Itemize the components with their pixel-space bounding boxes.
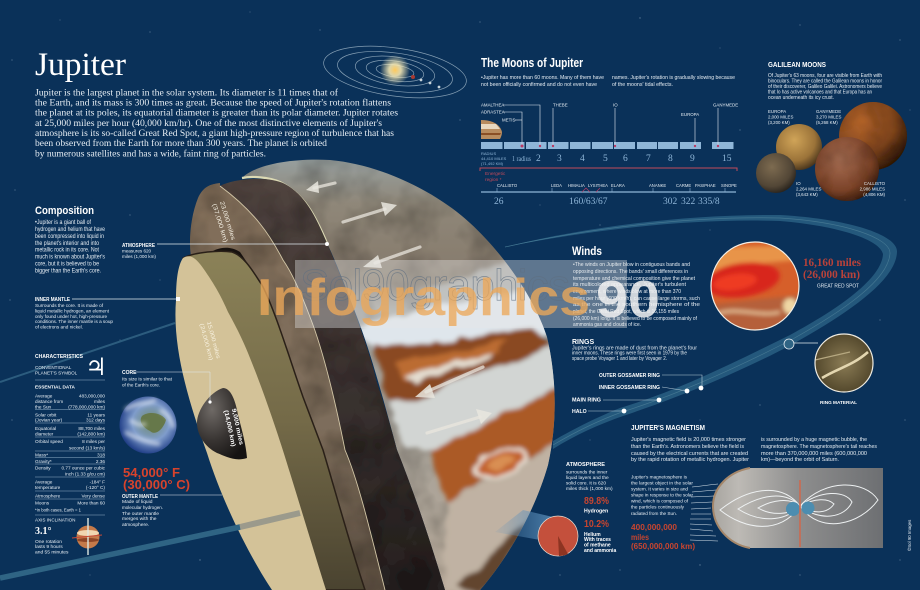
moon data labels: EUROPA	[768, 109, 786, 114]
radius numbers: 5	[603, 154, 608, 164]
outer moon names: CALLISTO	[497, 183, 518, 188]
essential data: 2.36	[96, 459, 105, 464]
spot size label: (26,000 km)	[803, 269, 860, 281]
wind arrows	[306, 181, 492, 433]
outer moon names: ELARA	[611, 183, 625, 188]
inner mantle callout: Surrounds the core. It is made of	[35, 303, 104, 309]
rings text	[572, 346, 697, 362]
outer moon numbers: 335/8	[698, 197, 720, 207]
inner moon names: GANYMEDE	[713, 102, 738, 108]
essential data: 483,000,000	[79, 394, 105, 398]
outer moon names: ANANKE	[649, 183, 666, 188]
moons text	[481, 75, 735, 88]
panel: moons of Jupiter	[480, 56, 738, 207]
essential data: Atmosphere	[35, 494, 61, 498]
core callout: of the Earth's core.	[122, 382, 160, 388]
radius note	[481, 151, 507, 166]
Galilean text: binoculars. They are called the Galilean moons in honor	[768, 78, 882, 84]
table rules	[35, 380, 105, 515]
inner moon names: THEBE	[553, 102, 568, 108]
radius numbers: 3	[557, 154, 562, 164]
essential data: 8 miles per	[82, 439, 105, 444]
size label inner mantle: (24,000 km)	[198, 323, 213, 361]
essential data: inch (1.33 g/cu cm)	[65, 472, 105, 476]
essential data: Very dense	[82, 494, 105, 498]
essential data: 318	[97, 452, 105, 458]
hydrogen stat: 89.8%	[584, 496, 609, 507]
magnetism text: than the Earth's. Astronomers believe the field is	[631, 444, 744, 450]
essential data: Solar orbit	[35, 412, 57, 418]
essential data: temperature	[35, 485, 61, 490]
dark atmosphere layer	[220, 179, 445, 590]
hydrogen stat	[584, 496, 609, 514]
outer mantle callout: merges with the	[122, 516, 157, 522]
radius numbers: 7	[646, 154, 651, 164]
radius numbers: 15	[722, 154, 732, 164]
moons text: •Jupiter has more than 60 moons. Many of them have	[481, 75, 604, 81]
core callout: CORE	[122, 370, 137, 376]
winds text: environment, where winds blow at more than 370	[573, 289, 681, 295]
size label core	[222, 408, 244, 448]
core temperature: (30,000° C)	[123, 478, 190, 492]
size label inner mantle	[198, 321, 221, 361]
outer moon names: LEDA	[551, 183, 562, 188]
winds text: planet, the Great Red Spot, which is 16,155 miles	[573, 309, 679, 315]
outer moon names: PASIPHAE	[695, 183, 716, 188]
panel: Galilean moons	[756, 62, 907, 201]
rings text: inner moons. These rings were first seen in 1979 by the	[572, 350, 687, 356]
magnetosphere diagram	[690, 468, 883, 548]
magnetosphere distance: miles	[631, 532, 649, 542]
intro paragraph: atmosphere is its so-called Great Red Spot, a giant high-pressure region of turbulence that has	[35, 128, 394, 139]
winds text: its multicolored appearance. Jupiter's turbulent	[573, 282, 686, 288]
essential data: -184° F	[90, 480, 105, 484]
magnetism text: caused by the electrical currents that are created	[631, 451, 748, 457]
moon data labels: 2,264 MILES	[796, 186, 821, 192]
radius note: RADIUS	[481, 151, 496, 156]
inner mantle callout: liquid metallic hydrogen, an element	[35, 308, 110, 314]
panel: core	[120, 370, 222, 528]
moon data labels: 3,270 MILES	[816, 114, 841, 120]
essential data: second (13 km/s)	[69, 446, 105, 450]
essential data: distance from	[35, 399, 63, 404]
essential data: diameter	[35, 432, 54, 436]
size label core: (14,000 km)	[222, 410, 236, 447]
composition text: the planet's interior and into	[35, 241, 100, 247]
globe light rim	[242, 177, 327, 243]
hydrogen stat: Hydrogen	[584, 508, 608, 514]
core temperature	[123, 466, 190, 492]
radius numbers: 8	[668, 154, 673, 164]
magnetism text	[631, 437, 877, 463]
inner moon names: METIS	[502, 118, 515, 122]
brown mantle ring	[190, 183, 385, 590]
helium stat: With traces	[584, 537, 611, 543]
moons text: names. Jupiter's rotation is gradually slowing because	[612, 75, 735, 81]
icon: Jupiter symbol: ♃	[85, 353, 107, 381]
magnetism text: by the rapid rotation of metallic hydrogen. Jupiter	[631, 457, 749, 463]
field lines	[720, 485, 878, 526]
outer mantle callout	[122, 494, 222, 528]
inner moon leaders	[503, 105, 718, 146]
essential data: More than 60	[77, 500, 105, 506]
core temperature: 54,000° F	[123, 466, 180, 480]
moon Europa	[776, 124, 822, 170]
magnetosphere distance	[631, 522, 695, 551]
atmosphere callout: ATMOSPHERE	[122, 243, 156, 249]
essential data	[35, 384, 106, 512]
rings text: space probe Voyager 1 and later by Voyager 2.	[572, 356, 667, 362]
panel: composition	[35, 205, 329, 330]
moons text: of the moons' tidal effects.	[612, 82, 673, 88]
radius numbers: 4	[580, 154, 585, 164]
magnetism heading: JUPITER'S MAGNETISM	[631, 425, 705, 432]
composition text: much is known about Jupiter's	[35, 254, 105, 260]
characteristics heading: CHARACTERISTICS	[35, 354, 84, 360]
axis inclination: and 55 minutes	[35, 550, 69, 556]
essential data: (142,800 km)	[77, 432, 105, 436]
outer moon scale	[481, 188, 736, 192]
composition text: core, but it is believed to be	[35, 262, 100, 268]
atmosphere heading: ATMOSPHERE	[566, 462, 605, 468]
radius note: (71,492 KM)	[481, 161, 504, 166]
magnetism text: km)—beyond the orbit of Saturn.	[761, 457, 839, 463]
composition text	[35, 220, 106, 274]
magnetosphere distance: (650,000,000 km)	[631, 541, 695, 551]
size label atmosphere: 23,000 miles	[218, 201, 236, 241]
outer mantle callout: Made of liquid	[122, 499, 153, 505]
axis inclination: One rotation	[35, 539, 62, 545]
panel: winds	[572, 242, 861, 335]
magnetosphere note: shape in response to the solar	[631, 492, 693, 498]
solar system orbit icon	[320, 38, 470, 106]
watermark: Sol90graphics	[300, 261, 570, 310]
image credit: ©Sol 90 Images	[907, 519, 912, 551]
winds text: (26,000 km) long. It is believed to be composed mainly of	[573, 316, 697, 322]
moon data labels: (4,806 KM)	[863, 192, 886, 197]
Great Red Spot inset	[710, 241, 800, 331]
inner moon names: EUROPA	[681, 112, 699, 117]
pie chart	[538, 516, 578, 556]
magnetosphere note: system. It varies in size and	[631, 486, 688, 492]
title: Jupiter	[35, 47, 126, 83]
composition text: bigger than the Earth's core.	[35, 268, 101, 274]
ring edge highlight	[220, 186, 385, 590]
outer mantle callout: molecular hydrogen.	[122, 505, 163, 511]
outer moon numbers	[494, 197, 720, 207]
winds text	[573, 262, 700, 328]
inner moon names: AMALTHEA	[481, 102, 504, 108]
axis inclination	[35, 518, 76, 556]
olive inner mantle side	[183, 251, 365, 590]
helium stat: of methane	[584, 542, 611, 548]
composition text: hydrogen and helium that have	[35, 227, 106, 233]
outer moon numbers: 26	[494, 197, 504, 207]
essential data: Moons	[35, 500, 50, 506]
ring labels: OUTER GOSSAMER RING	[599, 373, 660, 379]
essential data: (-120° C)	[86, 485, 105, 490]
outer moon names: CARME	[676, 183, 691, 188]
spot size label	[803, 257, 861, 290]
Galilean text: that Io has active volcanoes and that Europa has an	[768, 90, 872, 96]
winds text: •The winds on Jupiter blow in contiguous bands and	[573, 262, 690, 268]
essential data: Mass*	[35, 452, 48, 458]
moon position dots	[520, 144, 719, 148]
outer mantle callout: atmosphere.	[122, 522, 149, 528]
radius numbers: 1 radius	[512, 155, 531, 163]
moon data labels: 2,000 MILES	[768, 114, 793, 120]
essential data: 11 years	[87, 412, 106, 418]
moon data labels: (3,200 KM)	[768, 120, 790, 125]
core callout	[122, 370, 212, 404]
ring material inset: RING MATERIAL	[820, 400, 857, 406]
panel: characteristics table	[35, 353, 107, 556]
axis inclination: 3.1°	[35, 526, 52, 537]
moon Callisto	[815, 137, 879, 201]
ring lower left	[0, 527, 240, 578]
magnetism text: more than 370,000,000 miles (600,000,000	[761, 451, 867, 457]
essential data: Orbital speed	[35, 439, 63, 444]
size label atmosphere: (37,000 km)	[210, 203, 228, 243]
inner mantle callout	[35, 297, 180, 330]
winds text: ammonia gas and clouds of ice.	[573, 322, 641, 328]
essential data: Equatorial	[35, 426, 56, 431]
mantle hole shadow	[205, 248, 262, 300]
essential data: the Sun	[35, 404, 52, 410]
atmosphere text: solid core. It is 620	[566, 480, 606, 486]
planet cutaway	[175, 150, 570, 590]
panel: rings	[572, 334, 873, 415]
inner moon names: ADRASTEA	[481, 110, 505, 114]
essential data: 312 days	[86, 418, 106, 422]
composition text: been compressed into liquid in	[35, 234, 104, 240]
outer moon numbers: 302	[663, 197, 678, 207]
winds text: miles per hour (600 km/h), can cause large storms, such	[573, 296, 700, 302]
Galilean text: Of Jupiter's 63 moons, four are visible from Earth with	[768, 73, 882, 79]
magnetosphere note: radiated from the Sun.	[631, 511, 677, 517]
Galilean heading: GALILEAN MOONS	[768, 62, 826, 69]
size label atmosphere	[210, 201, 236, 243]
intro paragraph: at 25,000 miles per hour (40,000 km/hr). One of the most distinctive elements of Jupiter's	[35, 118, 382, 129]
spot size label: GREAT RED SPOT	[817, 284, 860, 290]
outer moon numbers: 160/63/67	[569, 197, 608, 207]
moon data labels: (3,643 KM)	[796, 192, 818, 197]
energetic region bracket	[480, 168, 737, 183]
icon: small Jupiter axis	[72, 518, 102, 555]
moon Ganymede	[839, 102, 907, 170]
symbol label	[35, 365, 78, 376]
intro paragraph: by numerous satellites and has a wide, faint ring of particles.	[35, 148, 266, 159]
watermark: Infographics	[257, 269, 590, 327]
panel: atmosphere composition	[495, 462, 616, 556]
mini Jupiter	[481, 120, 502, 139]
magnetosphere distance: 400,000,000	[631, 522, 677, 532]
essential data: (778,000,000 km)	[68, 404, 105, 410]
pie connector cone	[495, 510, 553, 540]
outer moon names: LYSITHEA	[588, 183, 608, 188]
ring labels	[572, 373, 660, 415]
moon data labels: IO	[796, 181, 801, 186]
magnetosphere note: the particles continuously	[631, 504, 685, 510]
outer mantle callout: OUTER MANTLE	[122, 494, 159, 500]
essential data: *In both cases, Earth = 1	[35, 508, 82, 512]
magnetism text: Jupiter's magnetic field is 20,000 times stronger	[631, 437, 746, 443]
icon: Earth	[120, 396, 176, 454]
atmosphere text: miles thick (1,000 km)	[566, 486, 613, 492]
ring leaders	[588, 375, 703, 413]
magnetism text: magnetosphere. The magnetosphere's tail reaches	[761, 444, 877, 450]
helium stat: 10.2%	[584, 519, 609, 530]
moons heading: The Moons of Jupiter	[481, 56, 583, 70]
atmosphere text: surrounds the inner	[566, 470, 608, 476]
winds text: opposing directions. The bands' small differences in	[573, 269, 688, 275]
magnetosphere note: wind, which is composed of	[631, 498, 689, 504]
radius scale bar	[481, 142, 734, 149]
moon data labels: (5,268 KM)	[816, 120, 838, 125]
essential data: Gravity*	[35, 459, 52, 464]
symbol label: CONVENTIONAL	[35, 365, 72, 370]
essential data: (Jovian year)	[35, 418, 63, 422]
radius numbers: 9	[690, 154, 695, 164]
energetic region bracket: region *	[485, 177, 502, 183]
moon data labels: GANYMEDE	[816, 109, 841, 114]
axis inclination: AXIS INCLINATION	[35, 518, 76, 522]
outer mantle callout: The outer mantle	[122, 511, 159, 517]
panel: magnetism	[631, 425, 912, 551]
moon Io	[756, 153, 796, 193]
helium stat: Helium	[584, 532, 601, 538]
helium stat: and ammonia	[584, 548, 616, 554]
magnetic axis	[799, 480, 801, 547]
magnetosphere note: the largest object in the solar	[631, 480, 693, 486]
ring labels: INNER GOSSAMER RING	[599, 385, 660, 391]
magnetosphere note: Jupiter's magnetosphere is	[631, 474, 688, 480]
radius numbers	[512, 154, 732, 164]
inner moon names	[481, 102, 738, 122]
watermark: 90	[596, 271, 660, 329]
essential data: miles	[94, 399, 106, 404]
cream cut surface	[175, 256, 326, 590]
Galilean text: of their discoverer, Galileo Galilei. Astronomers believe	[768, 84, 882, 90]
intro paragraph: the Earth, and its mass is 300 times as great. Because the speed of Jupiter's rotation flattens	[35, 98, 391, 108]
intro paragraph: Jupiter is the largest planet in the solar system. Its diameter is 11 times that of	[35, 88, 339, 98]
size label core: 9,000 miles	[230, 408, 244, 446]
radius numbers: 2	[536, 154, 541, 164]
solar wind arrows	[690, 484, 718, 541]
core half ball	[197, 388, 247, 459]
outer moon names: HIMALIA	[568, 183, 585, 188]
atmosphere callout: miles (1,000 km)	[122, 254, 156, 259]
rings heading: RINGS	[572, 339, 594, 346]
moons text: not been officially confirmed and do not even have	[481, 82, 597, 88]
ring labels: MAIN RING	[572, 398, 601, 404]
intro paragraph: the planet at its poles, its equatorial diameter is greater than its polar diameter. Jupiter rotates	[35, 108, 398, 119]
essential data: Average	[35, 394, 53, 398]
Galilean text: ocean underneath its icy crust.	[768, 95, 834, 101]
rings text: Jupiter's rings are made of dust from the planet's four	[572, 346, 697, 352]
inner mantle callout: only found under hot, high-pressure	[35, 314, 107, 320]
axis inclination: lasts 9 hours	[35, 544, 63, 550]
helium stat	[584, 519, 616, 554]
essential data: Density	[35, 466, 51, 470]
moon data labels	[768, 109, 886, 197]
outer moon numbers: 322	[681, 197, 696, 207]
atmosphere text: liquid layers and the	[566, 475, 609, 481]
inner mantle callout: of electrons and nickel.	[35, 324, 83, 330]
watermark	[257, 260, 660, 329]
symbol label: PLANET'S SYMBOL	[35, 370, 78, 376]
outer moon names	[497, 183, 737, 188]
moon data labels: CALLISTO	[864, 181, 886, 186]
ring material inset	[784, 334, 873, 406]
spot size label: 16,160 miles	[803, 257, 861, 269]
composition heading: Composition	[35, 205, 94, 217]
inner mantle callout: INNER MANTLE	[35, 297, 71, 303]
winds text: temperature and chemical composition give the planet	[573, 276, 695, 282]
ring labels: HALO	[572, 409, 587, 415]
core callout: Its size is similar to that	[122, 376, 173, 382]
winds text: as the one in the southern hemisphere of the	[573, 302, 700, 308]
atmosphere text	[566, 470, 613, 492]
inner mantle callout: conditions. The inner mantle is a soup	[35, 319, 113, 325]
essential data: 88,700 miles	[78, 426, 106, 431]
outer globe atmosphere	[243, 160, 555, 590]
intro paragraph	[35, 88, 398, 159]
composition text: •Jupiter is a giant ball of	[35, 220, 91, 226]
winds heading: Winds	[572, 246, 602, 258]
atmosphere callout: measures 620	[122, 248, 152, 254]
energetic region bracket: Energetic	[485, 171, 506, 177]
ring across cream	[240, 513, 300, 527]
inner moon names: IO	[613, 102, 618, 108]
atmosphere callout	[122, 242, 329, 259]
size label inner mantle: 15,000 miles	[205, 321, 221, 359]
essential data: ESSENTIAL DATA	[35, 384, 75, 390]
moon data labels: 2,986 MILES	[860, 186, 885, 192]
composition text: metallic rock in its core. Not	[35, 248, 99, 254]
radius numbers: 6	[623, 154, 628, 164]
intro paragraph: been observed from the Earth for more than 300 years. The planet is orbited	[35, 138, 327, 149]
essential data: 0.77 ounce per cubic	[61, 466, 106, 470]
radius note: 44,410 MILES	[481, 156, 507, 161]
essential data: Average	[35, 480, 53, 484]
planet lobes	[786, 502, 814, 516]
Galilean text	[768, 73, 882, 101]
magnetosphere note	[631, 474, 693, 517]
outer moon names: SINOPE	[721, 183, 737, 188]
Jupiter ring orbit	[0, 215, 897, 449]
magnetism text: is surrounded by a huge magnetic bubble, the	[761, 437, 867, 443]
